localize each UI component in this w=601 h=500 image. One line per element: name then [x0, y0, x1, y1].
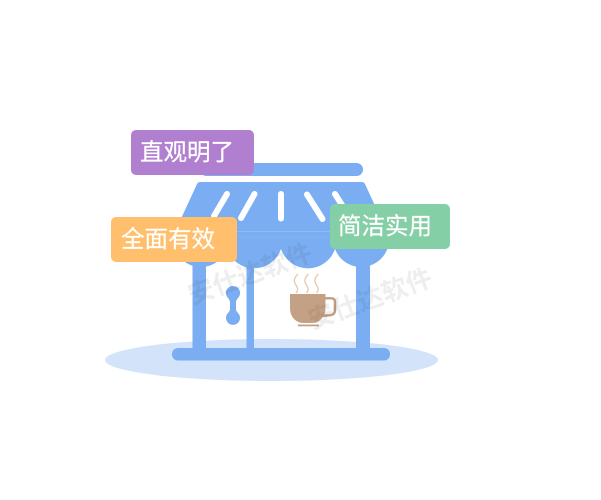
label: orange 全面有效	[111, 217, 237, 262]
label: orange 全面有效: 全面有效	[121, 226, 215, 252]
steam lines	[294, 274, 318, 293]
floor bar	[172, 348, 390, 360]
icon: door keyhole handle	[226, 286, 240, 325]
label: purple 直观明了	[131, 130, 254, 175]
storefront posts	[192, 255, 370, 353]
roof top bar	[200, 163, 363, 176]
icon: coffee cup	[290, 274, 335, 326]
label: green 简洁实用: 简洁实用	[338, 212, 432, 238]
label: green 简洁实用	[330, 204, 450, 248]
watermark: left: 安仕达软件	[184, 237, 316, 310]
watermark: right: 安仕达软件	[304, 262, 436, 335]
awning with scalloped edge	[173, 182, 389, 268]
ground shadow ellipse	[105, 339, 438, 381]
label: purple 直观明了: 直观明了	[140, 139, 234, 165]
awning white stripes	[214, 194, 349, 219]
